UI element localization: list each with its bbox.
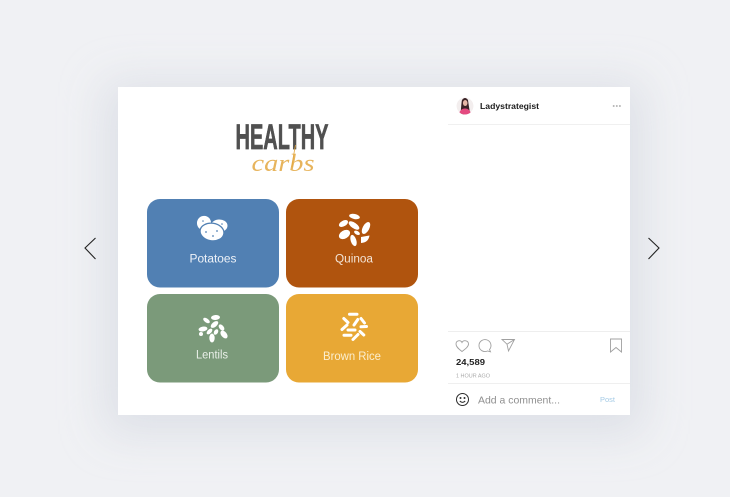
label: potatoes: Potatoes xyxy=(190,254,237,266)
like count: 24,589 xyxy=(456,357,485,367)
title: healthy: HEALTHY xyxy=(236,118,328,157)
icon: quinoa xyxy=(337,213,372,247)
title: carbs script: carbs xyxy=(252,151,314,177)
panel: quinoa xyxy=(286,199,418,288)
icon: smiley xyxy=(456,394,468,406)
post button: Post xyxy=(600,395,616,404)
panel: brown rice xyxy=(286,294,418,382)
icon: bookmark xyxy=(610,339,622,352)
panel: lentils xyxy=(147,294,279,382)
timestamp: 1 HOUR AGO xyxy=(456,374,490,380)
comment placeholder: Add a comment... xyxy=(478,394,560,406)
panel: post card xyxy=(118,87,630,415)
icon: lentils xyxy=(198,315,229,342)
icon: comment xyxy=(479,340,491,352)
arrow: next xyxy=(648,238,659,259)
icon: heart xyxy=(456,341,468,352)
panel: potatoes xyxy=(147,199,279,288)
icon: brown rice xyxy=(342,314,366,340)
username: Ladystrategist xyxy=(480,101,539,111)
more menu dots xyxy=(613,105,621,107)
label: lentils: Lentils xyxy=(196,350,228,362)
label: quinoa: Quinoa xyxy=(335,254,374,266)
title: carbs script xyxy=(252,145,314,177)
label: brown rice: Brown Rice xyxy=(323,351,381,363)
icon: share xyxy=(502,340,514,351)
avatar xyxy=(456,98,474,116)
arrow: previous xyxy=(85,238,96,259)
icon: potatoes xyxy=(195,214,228,242)
